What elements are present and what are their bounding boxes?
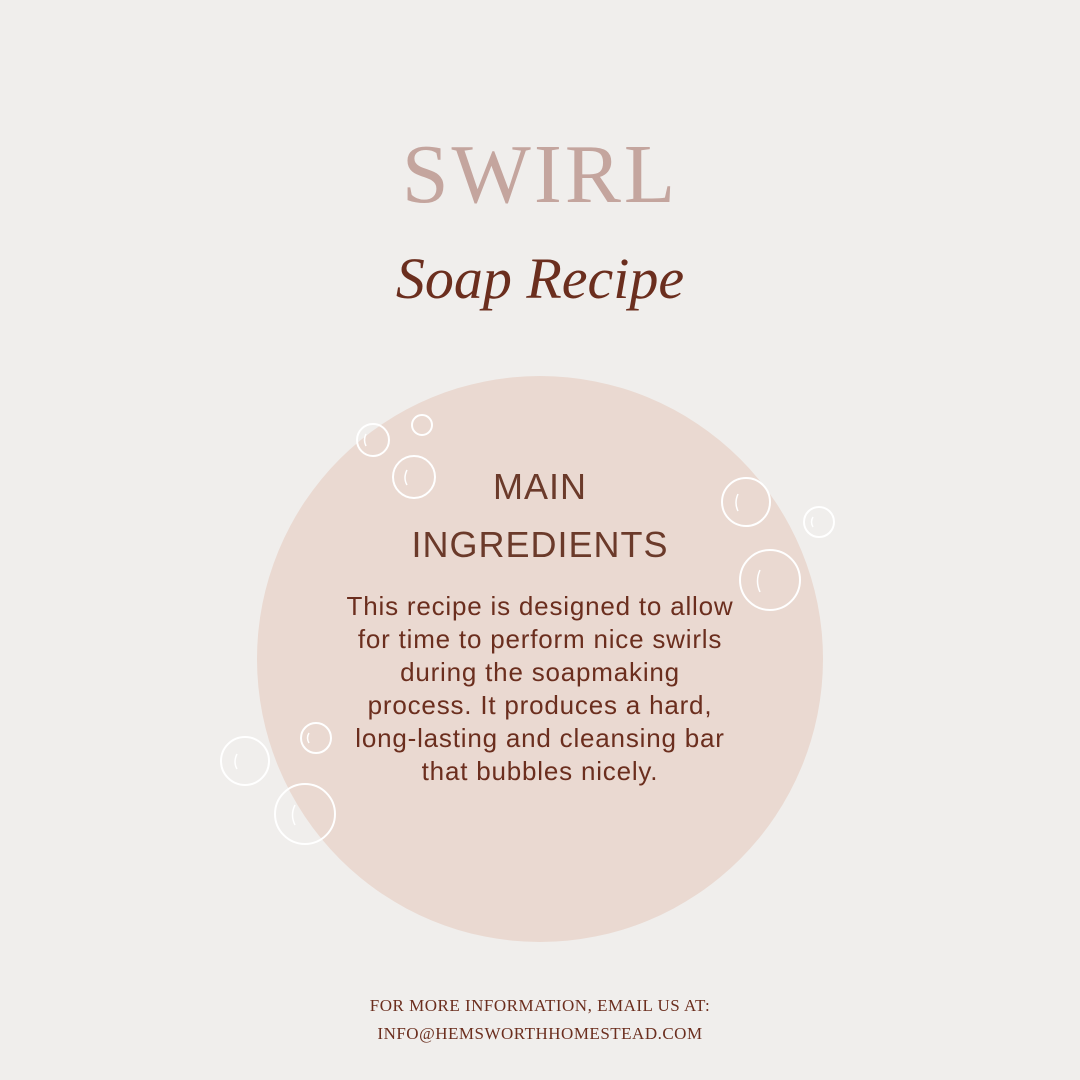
text block: description: This recipe is designed to allow <box>347 591 733 621</box>
heading: MAIN INGREDIENTS: MAIN <box>493 466 587 507</box>
footer: contact: INFO@HEMSWORTHHOMESTEAD.COM <box>377 1024 703 1043</box>
text block: description <box>347 591 733 786</box>
footer: contact <box>370 996 710 1043</box>
heading: MAIN INGREDIENTS: INGREDIENTS <box>411 524 669 565</box>
text block: description: process. It produces a hard, <box>368 690 712 720</box>
text block: description: for time to perform nice swirls <box>358 624 722 654</box>
text block: description: during the soapmaking <box>400 657 680 687</box>
title: SWIRL: SWIRL <box>402 128 678 221</box>
subtitle: Soap Recipe: Soap Recipe <box>396 246 684 311</box>
text block: description: long-lasting and cleansing bar <box>355 723 725 753</box>
heading: MAIN INGREDIENTS <box>411 466 669 565</box>
panel: circle <box>257 376 823 942</box>
text block: description: that bubbles nicely. <box>422 756 658 786</box>
footer: contact: FOR MORE INFORMATION, EMAIL US AT: <box>370 996 710 1015</box>
